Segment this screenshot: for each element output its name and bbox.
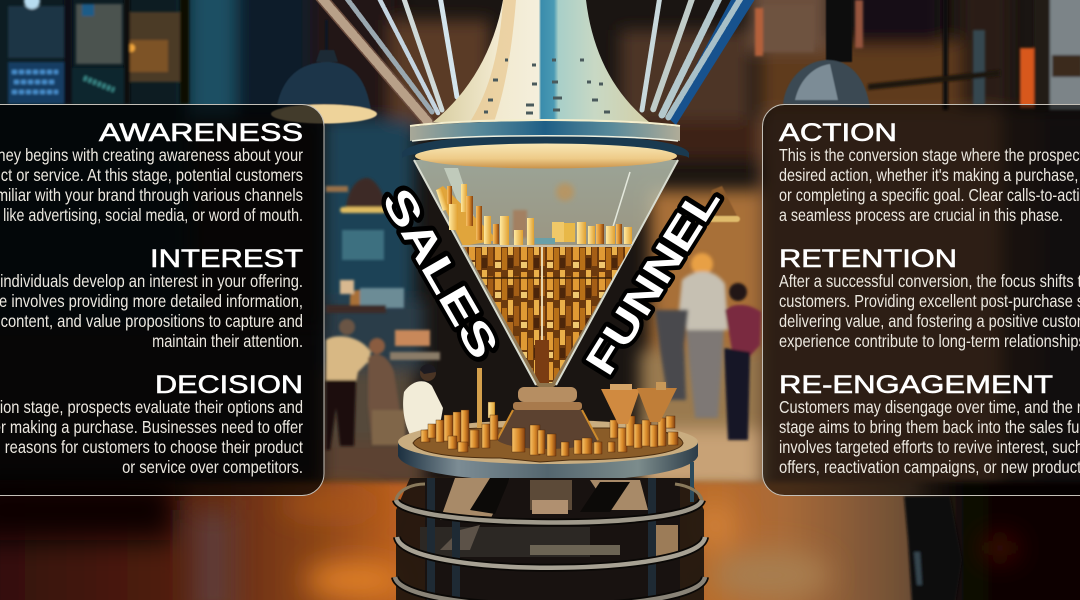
- heading: action: ACTION: [779, 119, 897, 147]
- upper-right pendant: [702, 186, 740, 222]
- panel: right stages: [762, 104, 1080, 496]
- upper ring and lit underside: [402, 120, 689, 168]
- heading: decision: DECISION: [155, 371, 303, 399]
- bell top of funnel: [433, 0, 649, 122]
- orange cones on platform: [601, 382, 677, 424]
- person: tan shirt: [326, 319, 371, 450]
- feed streaks right: [642, 0, 757, 125]
- mid-left blurred shelves: [326, 178, 440, 360]
- rotating platform: [398, 420, 698, 482]
- blurred people behind funnel: [326, 253, 761, 450]
- heading: re-engagement: RE-ENGAGEMENT: [779, 371, 1053, 399]
- text: decision: or service over competitors.: [122, 458, 303, 477]
- feed streaks left: [320, 0, 457, 122]
- heading: interest: INTEREST: [150, 245, 303, 273]
- title word: SALES: SALES: [373, 180, 508, 366]
- text: interest: maintain their attention.: [152, 332, 303, 351]
- text: re-engagement: [779, 398, 1080, 477]
- stem column detail: [477, 368, 482, 428]
- person: brown coat: [368, 338, 405, 445]
- guard ring 2: [397, 537, 705, 568]
- chef figure: [403, 364, 443, 435]
- small bars on platform: [421, 402, 678, 456]
- right wall art: [755, 0, 1080, 110]
- person: maroon top: [724, 283, 761, 440]
- title word: FUNNEL: FUNNEL: [576, 178, 729, 383]
- support tower with rings: [395, 462, 705, 600]
- text: interest: [0, 272, 303, 351]
- panel: left stages: [0, 104, 324, 496]
- guard ring 3: [395, 577, 705, 600]
- text: action: a seamless process are crucial in this phase.: [779, 206, 1063, 225]
- text: decision: [0, 398, 303, 477]
- heading: retention: RETENTION: [779, 245, 957, 273]
- text: awareness: [0, 146, 303, 225]
- text: awareness: like advertising, social media, or word of mouth.: [3, 206, 303, 225]
- hanging lamp left: [271, 20, 377, 124]
- hanging lamp right: [783, 0, 870, 108]
- top-left shop windows: [8, 0, 189, 104]
- guard ring 1: [396, 500, 702, 523]
- dense orange interior: [460, 245, 635, 385]
- orange bars skyline inside cone: [436, 184, 632, 246]
- dark foreground people, lower right: [904, 496, 962, 600]
- text: retention: [779, 272, 1080, 351]
- person: grey jacket: [655, 310, 688, 400]
- heading: awareness: AWARENESS: [99, 119, 303, 147]
- text: action: [779, 146, 1080, 225]
- funnel illustration: [320, 0, 757, 600]
- glass cone: [414, 160, 678, 388]
- floor: [0, 482, 1080, 600]
- person: white shirt, right: [679, 253, 728, 418]
- funnel stem and base: [497, 387, 598, 449]
